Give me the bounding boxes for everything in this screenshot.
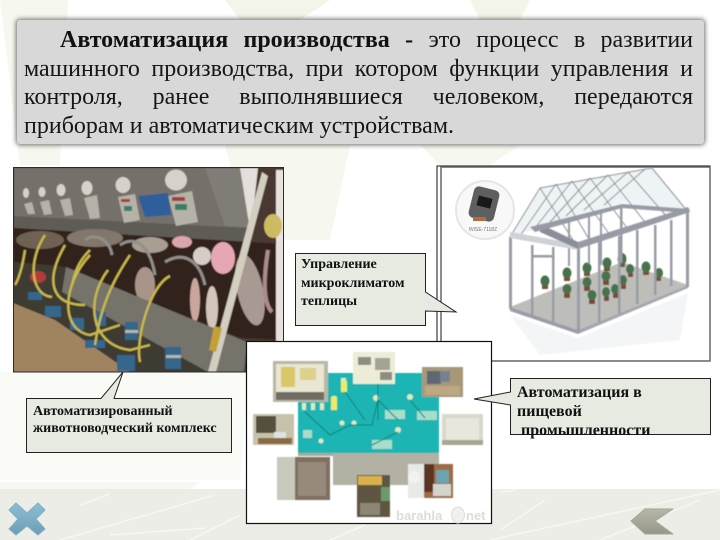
caption: automated livestock complex: Автоматизированный животноводческий комплекс	[33, 404, 217, 436]
text block: definition of production automation	[17, 20, 704, 144]
icon: back chevron button	[631, 509, 673, 534]
text block: definition of production automation: приборам и автоматическим устройствам.	[24, 113, 454, 139]
panel: food industry control diagram	[246, 342, 492, 524]
callout: livestock complex shape	[26, 372, 232, 452]
plants	[542, 263, 661, 304]
inset photos	[273, 361, 328, 402]
photo: greenhouse with climate controller	[437, 166, 710, 361]
eaves	[510, 232, 578, 250]
posts	[509, 205, 689, 333]
photo: automated milking parlour	[13, 167, 284, 372]
floor	[510, 262, 688, 330]
icon: close cross button	[9, 503, 45, 535]
icon: controller module in a circle: WISE-7118Z	[469, 227, 497, 233]
panel: food industry control diagram: net	[466, 508, 486, 523]
reflection	[510, 293, 688, 355]
text block: definition of production automation: машинного производства, при котором функции управления и	[24, 56, 693, 82]
icon: controller module in a circle	[456, 181, 514, 239]
caption: food industry automation: Автоматизация в пищевой промышленности	[517, 384, 650, 439]
callout: food industry shape	[474, 378, 710, 434]
callout: microclimate control shape	[296, 254, 456, 326]
text block: definition of production automation: Автоматизация производства - это процесс в развитии	[60, 27, 693, 53]
roof glazing	[514, 169, 683, 234]
caption: microclimate control: Управление микроклиматом теплицы	[301, 257, 404, 309]
teal process diagram	[298, 373, 439, 453]
watermark: barahla	[396, 508, 443, 523]
text block: definition of production automation: контроля, ранее выполнявшиеся человеком, передаются	[24, 84, 693, 110]
